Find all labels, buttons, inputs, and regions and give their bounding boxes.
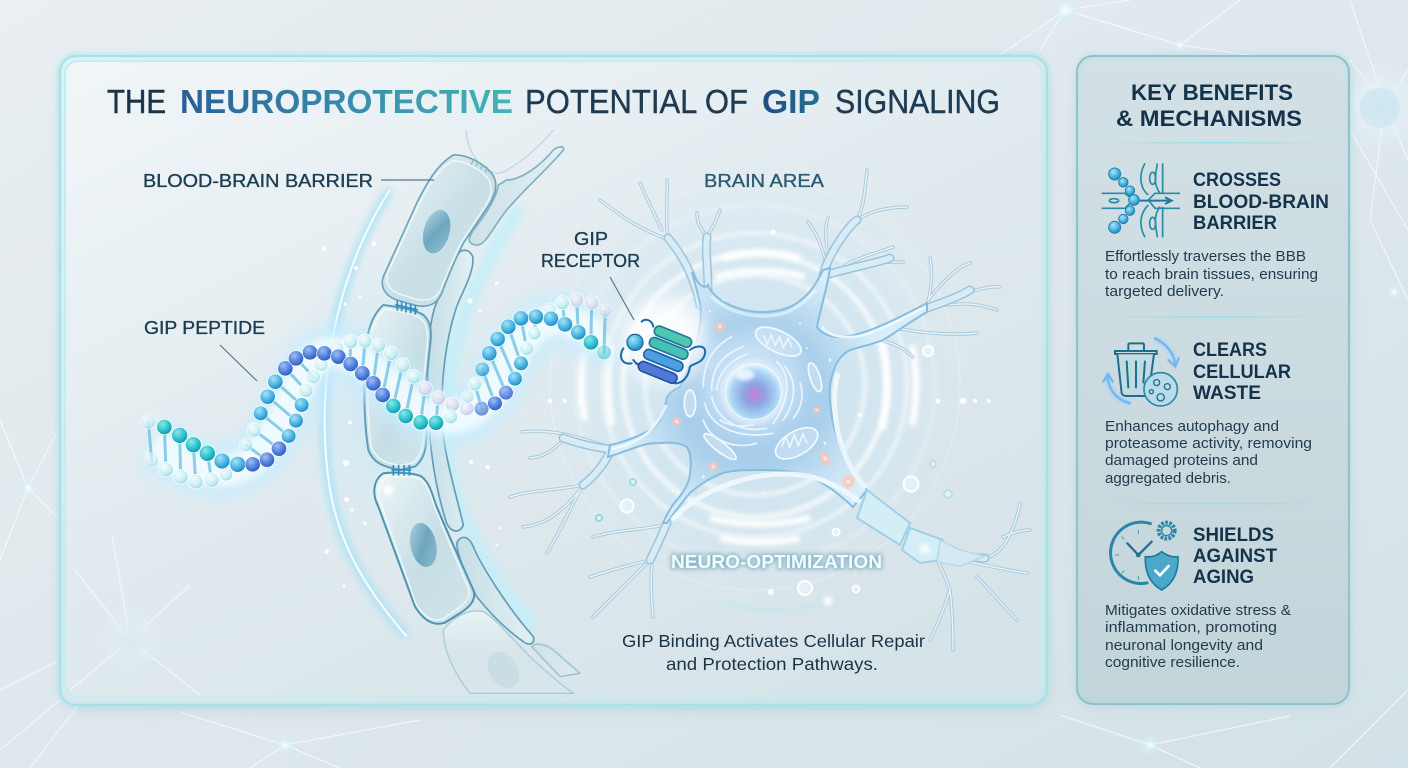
channels — [428, 147, 580, 677]
heading: SHIELDS — [1193, 525, 1274, 546]
diagram labels: BLOOD-BRAIN BARRIER — [143, 170, 373, 191]
description: inflammation, promoting — [1105, 620, 1277, 636]
rungs — [148, 300, 605, 482]
floating vesicles — [596, 346, 952, 595]
benefit 3 — [1105, 522, 1291, 671]
endothelial cell 3 — [374, 473, 474, 624]
heading: CELLULAR — [1193, 362, 1291, 383]
upper cell fragment — [467, 130, 553, 173]
heading — [1193, 170, 1329, 234]
leader lines — [220, 180, 634, 381]
benefit 2 — [1103, 338, 1312, 487]
GIP peptide helix — [141, 293, 612, 489]
side panel heading: KEY BENEFITS — [1131, 80, 1293, 105]
heading: WASTE — [1193, 383, 1261, 404]
title: GIP — [762, 83, 820, 120]
cytoplasm specks — [696, 299, 831, 494]
title: SIGNALING — [835, 83, 1000, 120]
blood-brain barrier — [287, 130, 580, 694]
endothelial cell 1 — [382, 155, 496, 306]
main panel — [60, 56, 1047, 708]
GIP receptor — [621, 320, 705, 385]
side panel heading: & MECHANISMS — [1116, 106, 1302, 131]
axon segments — [857, 490, 985, 566]
caption — [622, 631, 925, 674]
side panel heading — [1116, 80, 1302, 131]
diagram labels: BRAIN AREA — [704, 170, 825, 191]
title — [107, 83, 1000, 120]
cell body — [608, 268, 927, 523]
neuro-optimization label: NEURO-OPTIMIZATION — [671, 551, 882, 572]
endoplasmic reticulum — [703, 337, 802, 445]
barrier glow — [287, 190, 533, 637]
heading: BLOOD-BRAIN — [1193, 192, 1329, 213]
mitochondria — [684, 321, 824, 465]
icon: clock, gear and shield — [1111, 522, 1178, 590]
benefit 1 — [1102, 163, 1329, 300]
diagram labels: GIP PEPTIDE — [144, 317, 265, 338]
description: aggregated debris. — [1105, 471, 1231, 487]
description — [1105, 603, 1291, 671]
description: damaged proteins and — [1105, 453, 1258, 469]
description: Enhances autophagy and — [1105, 419, 1279, 435]
description: to reach brain tissues, ensuring — [1105, 267, 1318, 283]
soma rim highlights — [612, 290, 925, 520]
signal sparks — [671, 320, 857, 490]
caption: and Protection Pathways. — [666, 654, 878, 674]
tight junctions — [391, 301, 418, 476]
description: proteasome activity, removing — [1105, 436, 1312, 452]
diagram labels: GIP — [574, 228, 608, 249]
description: targeted delivery. — [1105, 284, 1224, 300]
heading: CROSSES — [1193, 170, 1281, 191]
description: Effortlessly traverses the BBB — [1105, 249, 1306, 265]
faint panel neuron — [70, 535, 200, 695]
organelles — [671, 299, 857, 494]
description: neuronal longevity and — [1105, 638, 1263, 654]
ripple rings around neuron — [530, 160, 980, 610]
description — [1105, 419, 1312, 487]
side panel: key benefits — [1077, 56, 1349, 704]
nucleus — [720, 358, 787, 425]
front strand beads — [157, 309, 599, 472]
dendrites — [510, 170, 1030, 650]
icon: recycling bin — [1103, 338, 1179, 406]
helix glow — [153, 320, 607, 471]
icon: crossing barrier — [1102, 163, 1180, 237]
barrier sparkles — [322, 242, 501, 587]
title: NEUROPROTECTIVE — [180, 83, 513, 120]
caption: GIP Binding Activates Cellular Repair — [622, 631, 925, 651]
ripple dots — [548, 230, 991, 417]
heading: AGAINST — [1193, 546, 1277, 567]
glowing streak — [720, 596, 832, 610]
heading — [1193, 340, 1291, 404]
heading: AGING — [1193, 567, 1254, 588]
heading: BARRIER — [1193, 213, 1277, 234]
endothelial cell 4 — [443, 611, 573, 694]
diagram labels — [143, 170, 825, 338]
pale back strand beads — [141, 293, 612, 489]
title: THE — [107, 83, 166, 120]
title: POTENTIAL OF — [525, 83, 748, 120]
bright ripple highlights — [582, 253, 916, 542]
description: Mitigates oxidative stress & — [1105, 603, 1291, 619]
description: cognitive resilience. — [1105, 655, 1240, 671]
heading: CLEARS — [1193, 340, 1267, 361]
endothelial cell 2 — [364, 305, 431, 470]
neuron — [510, 170, 1030, 650]
neuro-optimization label: NEURO-OPTIMIZATION — [671, 551, 882, 572]
diagram labels: RECEPTOR — [541, 250, 640, 271]
heading — [1193, 525, 1277, 588]
description — [1105, 249, 1318, 300]
